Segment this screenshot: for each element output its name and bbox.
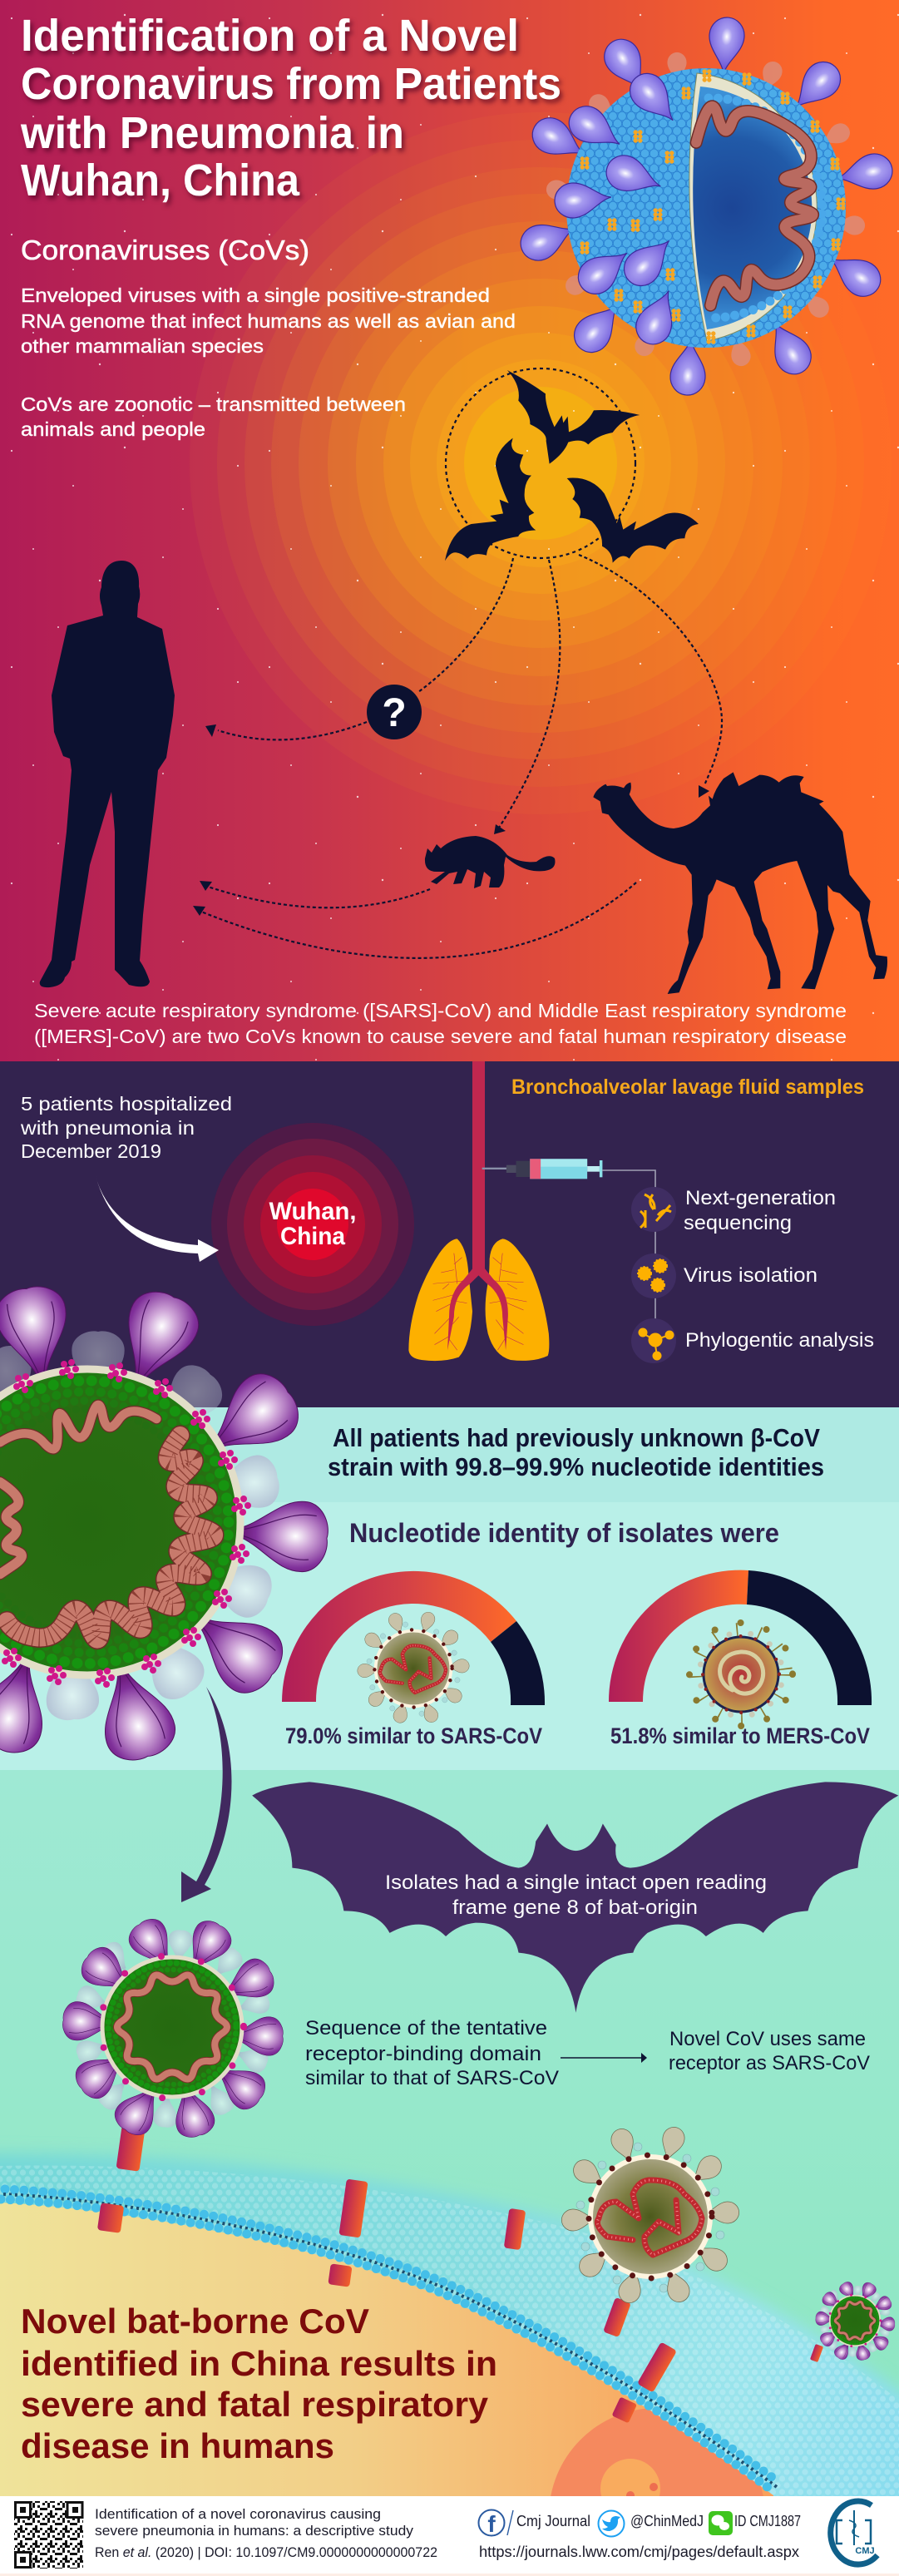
arrow: bat to civet [494, 560, 560, 834]
title: Identification of a Novel [21, 11, 519, 61]
text block: patients: 5 patients hospitalized [21, 1093, 232, 1115]
panel: origins background [0, 0, 899, 1061]
text block: receptor-binding domain: Sequence of the tentative [305, 2017, 547, 2040]
text block: citation: severe pneumonia in humans: a descriptive study [95, 2523, 414, 2539]
icon: coronavirus cross-section [516, 16, 896, 397]
icon: camel [593, 772, 887, 994]
text block: definition: RNA genome that infect humans as well as avian and [21, 310, 516, 332]
text block: receptor-binding domain: receptor-binding domain [305, 2043, 541, 2065]
icon: receptors on membrane [97, 2125, 823, 2423]
panel: teal findings background [0, 1407, 899, 1770]
text block: same receptor: receptor as SARS-CoV [669, 2052, 870, 2074]
icon: civet [425, 836, 556, 888]
icon: virus isolation [631, 1253, 676, 1298]
text block: citation: Identification of a novel coronavirus causing [95, 2506, 381, 2522]
conclusion heading: disease in humans [21, 2426, 334, 2465]
icon: novel coronavirus binding receptor [62, 1913, 283, 2141]
arrow: camel to human [193, 883, 636, 958]
arrow: virus zoom down [181, 1687, 231, 1902]
icon: question mark: ? [382, 691, 407, 735]
title [20, 11, 561, 205]
arrow: domain to receptor [561, 2053, 647, 2063]
chart: SARS gauge [282, 1571, 545, 1724]
panel: lipid bilayer [1, 2189, 778, 2492]
text block: receptor-binding domain [305, 2017, 559, 2089]
text block: bat origin [385, 1871, 767, 1919]
icon: dashed circle around bats [446, 368, 635, 558]
icon: MERS virus [689, 1623, 793, 1726]
heading: Coronaviruses: Coronaviruses (CoVs) [21, 235, 309, 265]
label: virus isolation: Virus isolation [684, 1264, 817, 1287]
icon: three bats [445, 370, 699, 563]
arrow: civet to human [200, 881, 430, 907]
text block: patients: with pneumonia in [20, 1117, 195, 1139]
label: Wuhan, China: Wuhan, [269, 1198, 356, 1225]
text block: SARS and MERS [34, 1000, 847, 1047]
text block: zoonotic [21, 393, 406, 440]
icon: next-generation sequencing [631, 1187, 676, 1232]
icon: CMJ logo: CMJ [855, 2546, 875, 2556]
text block: SARS and MERS: ([MERS]-CoV) are two CoVs known to cause severe and fatal human respiratory disease [34, 1026, 847, 1047]
arrow: unknown host to human [205, 722, 367, 739]
label: next-generation sequencing [684, 1187, 836, 1234]
label: SARS similarity: 79.0% similar to SARS-CoV [285, 1723, 542, 1748]
icon: question mark [367, 685, 422, 739]
panel: patient samples background [0, 1061, 899, 1407]
icon: SARS-like virus at membrane [561, 2124, 739, 2306]
title: Coronavirus from Patients [21, 59, 561, 109]
label: Wuhan, China: China [280, 1223, 345, 1250]
icon: facebook: f [487, 2511, 496, 2537]
title: Wuhan, China [21, 156, 300, 205]
text block: citation: Ren et al. (2020) | DOI: 10.1097/CM9.0000000000000722 [95, 2544, 437, 2560]
conclusion heading: identified in China results in [21, 2344, 497, 2383]
icon: wechat [709, 2511, 733, 2535]
link: journal URL: https://journals.lww.com/cmj/pages/default.aspx [479, 2544, 799, 2560]
icon: twitter [599, 2510, 624, 2537]
panel: cell interior [0, 2203, 773, 2496]
text block: unknown strain [328, 1423, 824, 1481]
icon: QR code [14, 2501, 83, 2569]
label: MERS similarity: 51.8% similar to MERS-CoV [610, 1723, 870, 1748]
icon: CMJ logo [831, 2501, 877, 2564]
arrow: bat to unknown host [418, 558, 513, 692]
icon: phylogenetic analysis [631, 1318, 676, 1363]
text block: unknown strain: strain with 99.8–99.9% nucleotide identities [328, 1452, 824, 1481]
text block: SARS and MERS: Severe acute respiratory syndrome ([SARS]-CoV) and Middle East respiratory syndrome [34, 1000, 847, 1021]
text block: definition: other mammalian species [21, 335, 264, 357]
panel: cell membrane field [0, 2149, 899, 2496]
icon: small novel coronavirus [815, 2280, 895, 2361]
text block: zoonotic: CoVs are zoonotic – transmitted between [21, 393, 406, 415]
label: phylogenetic analysis: Phylogentic analysis [685, 1329, 874, 1352]
label: Cmj Journal: Cmj Journal [516, 2513, 590, 2529]
icon: Wuhan target rings [211, 1123, 414, 1326]
text block: citation [95, 2506, 437, 2560]
icon: human silhouette [40, 561, 175, 987]
label: next-generation sequencing: Next-generation [685, 1187, 836, 1209]
connector: syringe to analysis steps [602, 1170, 655, 1323]
arrow: bat to camel [579, 555, 722, 798]
heading: nucleotide identity: Nucleotide identity of isolates were [349, 1518, 779, 1548]
text block: definition: Enveloped viruses with a single positive-stranded [21, 284, 490, 306]
conclusion heading: severe and fatal respiratory [21, 2385, 489, 2424]
arrow: patients to Wuhan [95, 1174, 219, 1262]
icon: facebook [479, 2510, 513, 2537]
text block: definition [21, 284, 516, 357]
icon: large novel coronavirus [0, 1282, 330, 1768]
conclusion heading [21, 2302, 497, 2465]
panel: footer [0, 2496, 899, 2576]
label: ChinMedJ: @ChinMedJ [630, 2513, 704, 2529]
heading: Bronchoalveolar: Bronchoalveolar lavage fluid samples [511, 1075, 864, 1099]
icon: trachea and lungs [408, 1061, 549, 1361]
text block: same receptor [669, 2028, 870, 2074]
title: with Pneumonia in [20, 108, 404, 158]
chart: MERS gauge [609, 1570, 872, 1726]
text block: patients [20, 1093, 232, 1162]
text block: unknown strain: All patients had previously unknown β-CoV [333, 1423, 820, 1452]
icon: bat shape [252, 1782, 898, 2013]
text block: receptor-binding domain: similar to that of SARS-CoV [305, 2067, 559, 2089]
icon: cell nucleus [551, 2409, 763, 2496]
conclusion heading: Novel bat-borne CoV [21, 2302, 369, 2341]
label: WeChat ID: ID CMJ1887 [734, 2513, 801, 2529]
label: Wuhan, China [269, 1198, 356, 1250]
text block: bat origin: Isolates had a single intact open reading [385, 1871, 767, 1894]
text block: same receptor: Novel CoV uses same [669, 2028, 866, 2050]
text block: zoonotic: animals and people [21, 418, 205, 440]
panel: green bat-origin background [0, 1770, 899, 2496]
text block: bat origin: frame gene 8 of bat-origin [452, 1896, 698, 1919]
icon: SARS virus [358, 1610, 470, 1724]
icon: syringe [482, 1159, 602, 1179]
text block: patients: December 2019 [21, 1140, 161, 1162]
label: next-generation sequencing: sequencing [684, 1212, 792, 1234]
